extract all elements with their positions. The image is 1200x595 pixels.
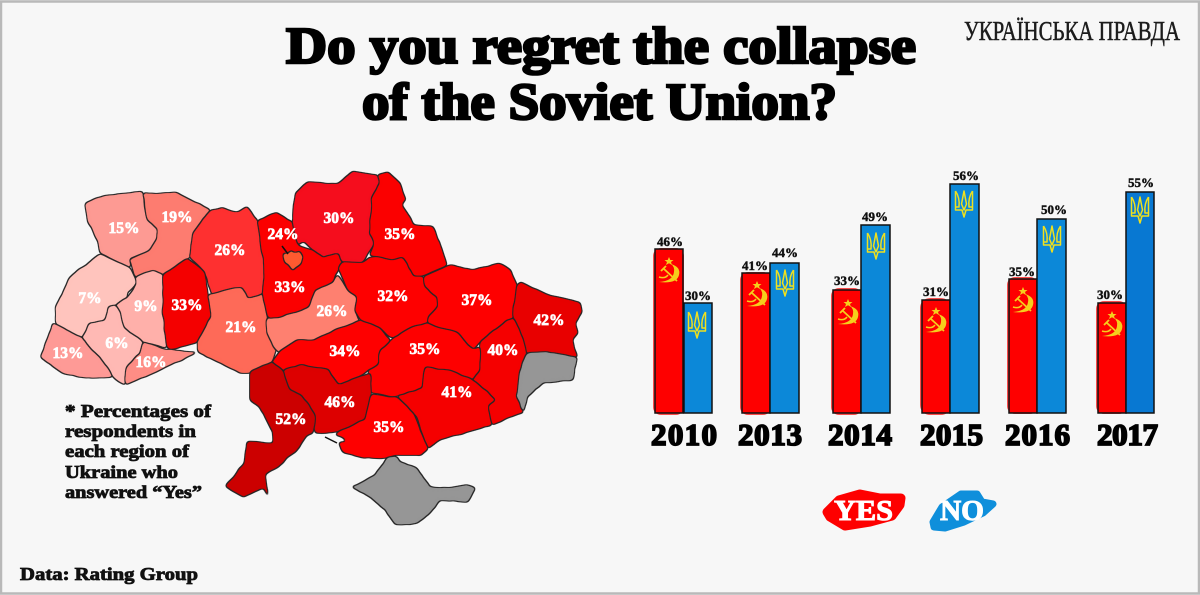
bars 2016 [1005,202,1070,452]
regional percentages: 35% [374,419,404,436]
map footnote: each region of [65,441,190,461]
bars 2017: 30% [1097,287,1123,302]
bars 2017: 55% [1128,175,1154,190]
regional percentages: 26% [316,303,348,320]
regional percentages: 33% [172,297,202,314]
bars 2015 [920,168,983,452]
bars 2010 [651,234,717,452]
regional percentages: 9% [134,298,158,315]
regional percentages: 37% [462,292,492,309]
bars 2015: 31% [923,284,949,299]
bars 2016: 50% [1041,202,1067,217]
legend: YES: YES [834,495,893,527]
legend: NO: NO [940,495,984,527]
bars 2017: 2017 [1097,417,1158,452]
ink marks at Kyiv and the Dnipro mouth [282,246,337,443]
map footnote: answered “Yes” [65,482,202,502]
bars 2013 [738,245,802,452]
regional percentages: 30% [324,210,354,227]
map region shapes [40,171,582,525]
regional percentages: 42% [534,312,564,329]
regional percentages: 24% [268,226,298,243]
map footnote: * Percentages of [65,401,212,421]
title: Do you regret the collapse [286,18,916,75]
bars 2010: 30% [685,288,711,303]
title [286,18,916,131]
regional percentages: 7% [78,290,102,307]
regional percentages: 41% [442,384,472,401]
regional percentages: 19% [162,209,192,226]
legend: NO [933,494,993,528]
regional percentages: 52% [276,411,306,428]
map footnote [65,401,212,502]
bars 2010: 2010 [651,417,717,452]
regional percentages: 15% [108,220,140,237]
map of Ukraine by region [40,171,582,525]
bars 2016: 2016 [1005,417,1070,452]
bars 2015: 2015 [920,417,983,452]
map footnote: respondents in [65,421,196,441]
regional percentages [52,209,564,436]
bars 2010: 46% [657,234,683,249]
bars 2014 [828,209,892,452]
regional percentages: 34% [330,343,360,360]
map footnote: Ukraine who [65,462,178,482]
regional percentages: 26% [214,242,246,259]
data source: Data: Rating Group [20,564,198,584]
title: of the Soviet Union? [362,74,837,131]
bars 2014: 2014 [828,417,892,452]
regional percentages: 13% [52,345,84,362]
bars 2013: 2013 [738,417,802,452]
bars 2014: 49% [862,209,888,224]
bars 2016: 35% [1009,264,1035,279]
regional percentages: 6% [105,335,129,352]
regional percentages: 35% [384,226,416,243]
regional percentages: 40% [488,342,518,359]
regional percentages: 32% [378,288,408,305]
bars 2013: 44% [772,245,798,260]
regional percentages: 46% [324,394,356,411]
bars 2015: 56% [953,168,979,183]
bar chart by year [651,168,1158,452]
regional percentages: 33% [274,279,306,296]
regional percentages: 16% [136,354,166,371]
bars 2013: 41% [742,258,768,273]
regional percentages: 21% [226,319,256,336]
bars 2017 [1096,175,1158,452]
bars 2014: 33% [834,273,860,288]
regional percentages: 35% [410,341,440,358]
